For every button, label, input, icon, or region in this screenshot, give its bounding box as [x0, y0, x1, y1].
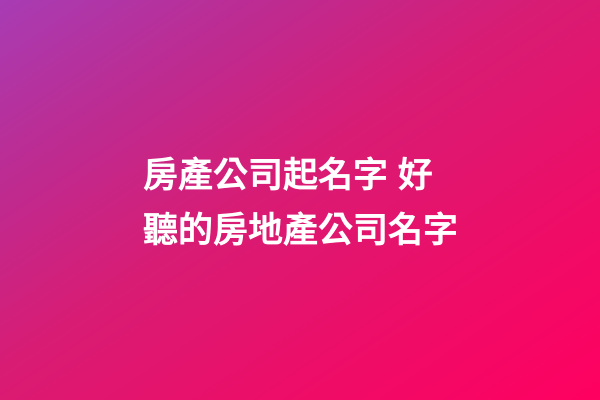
title line 1: 房產公司起名字 好	[143, 156, 433, 195]
title line 2: 聽的房地產公司名字	[143, 211, 458, 250]
